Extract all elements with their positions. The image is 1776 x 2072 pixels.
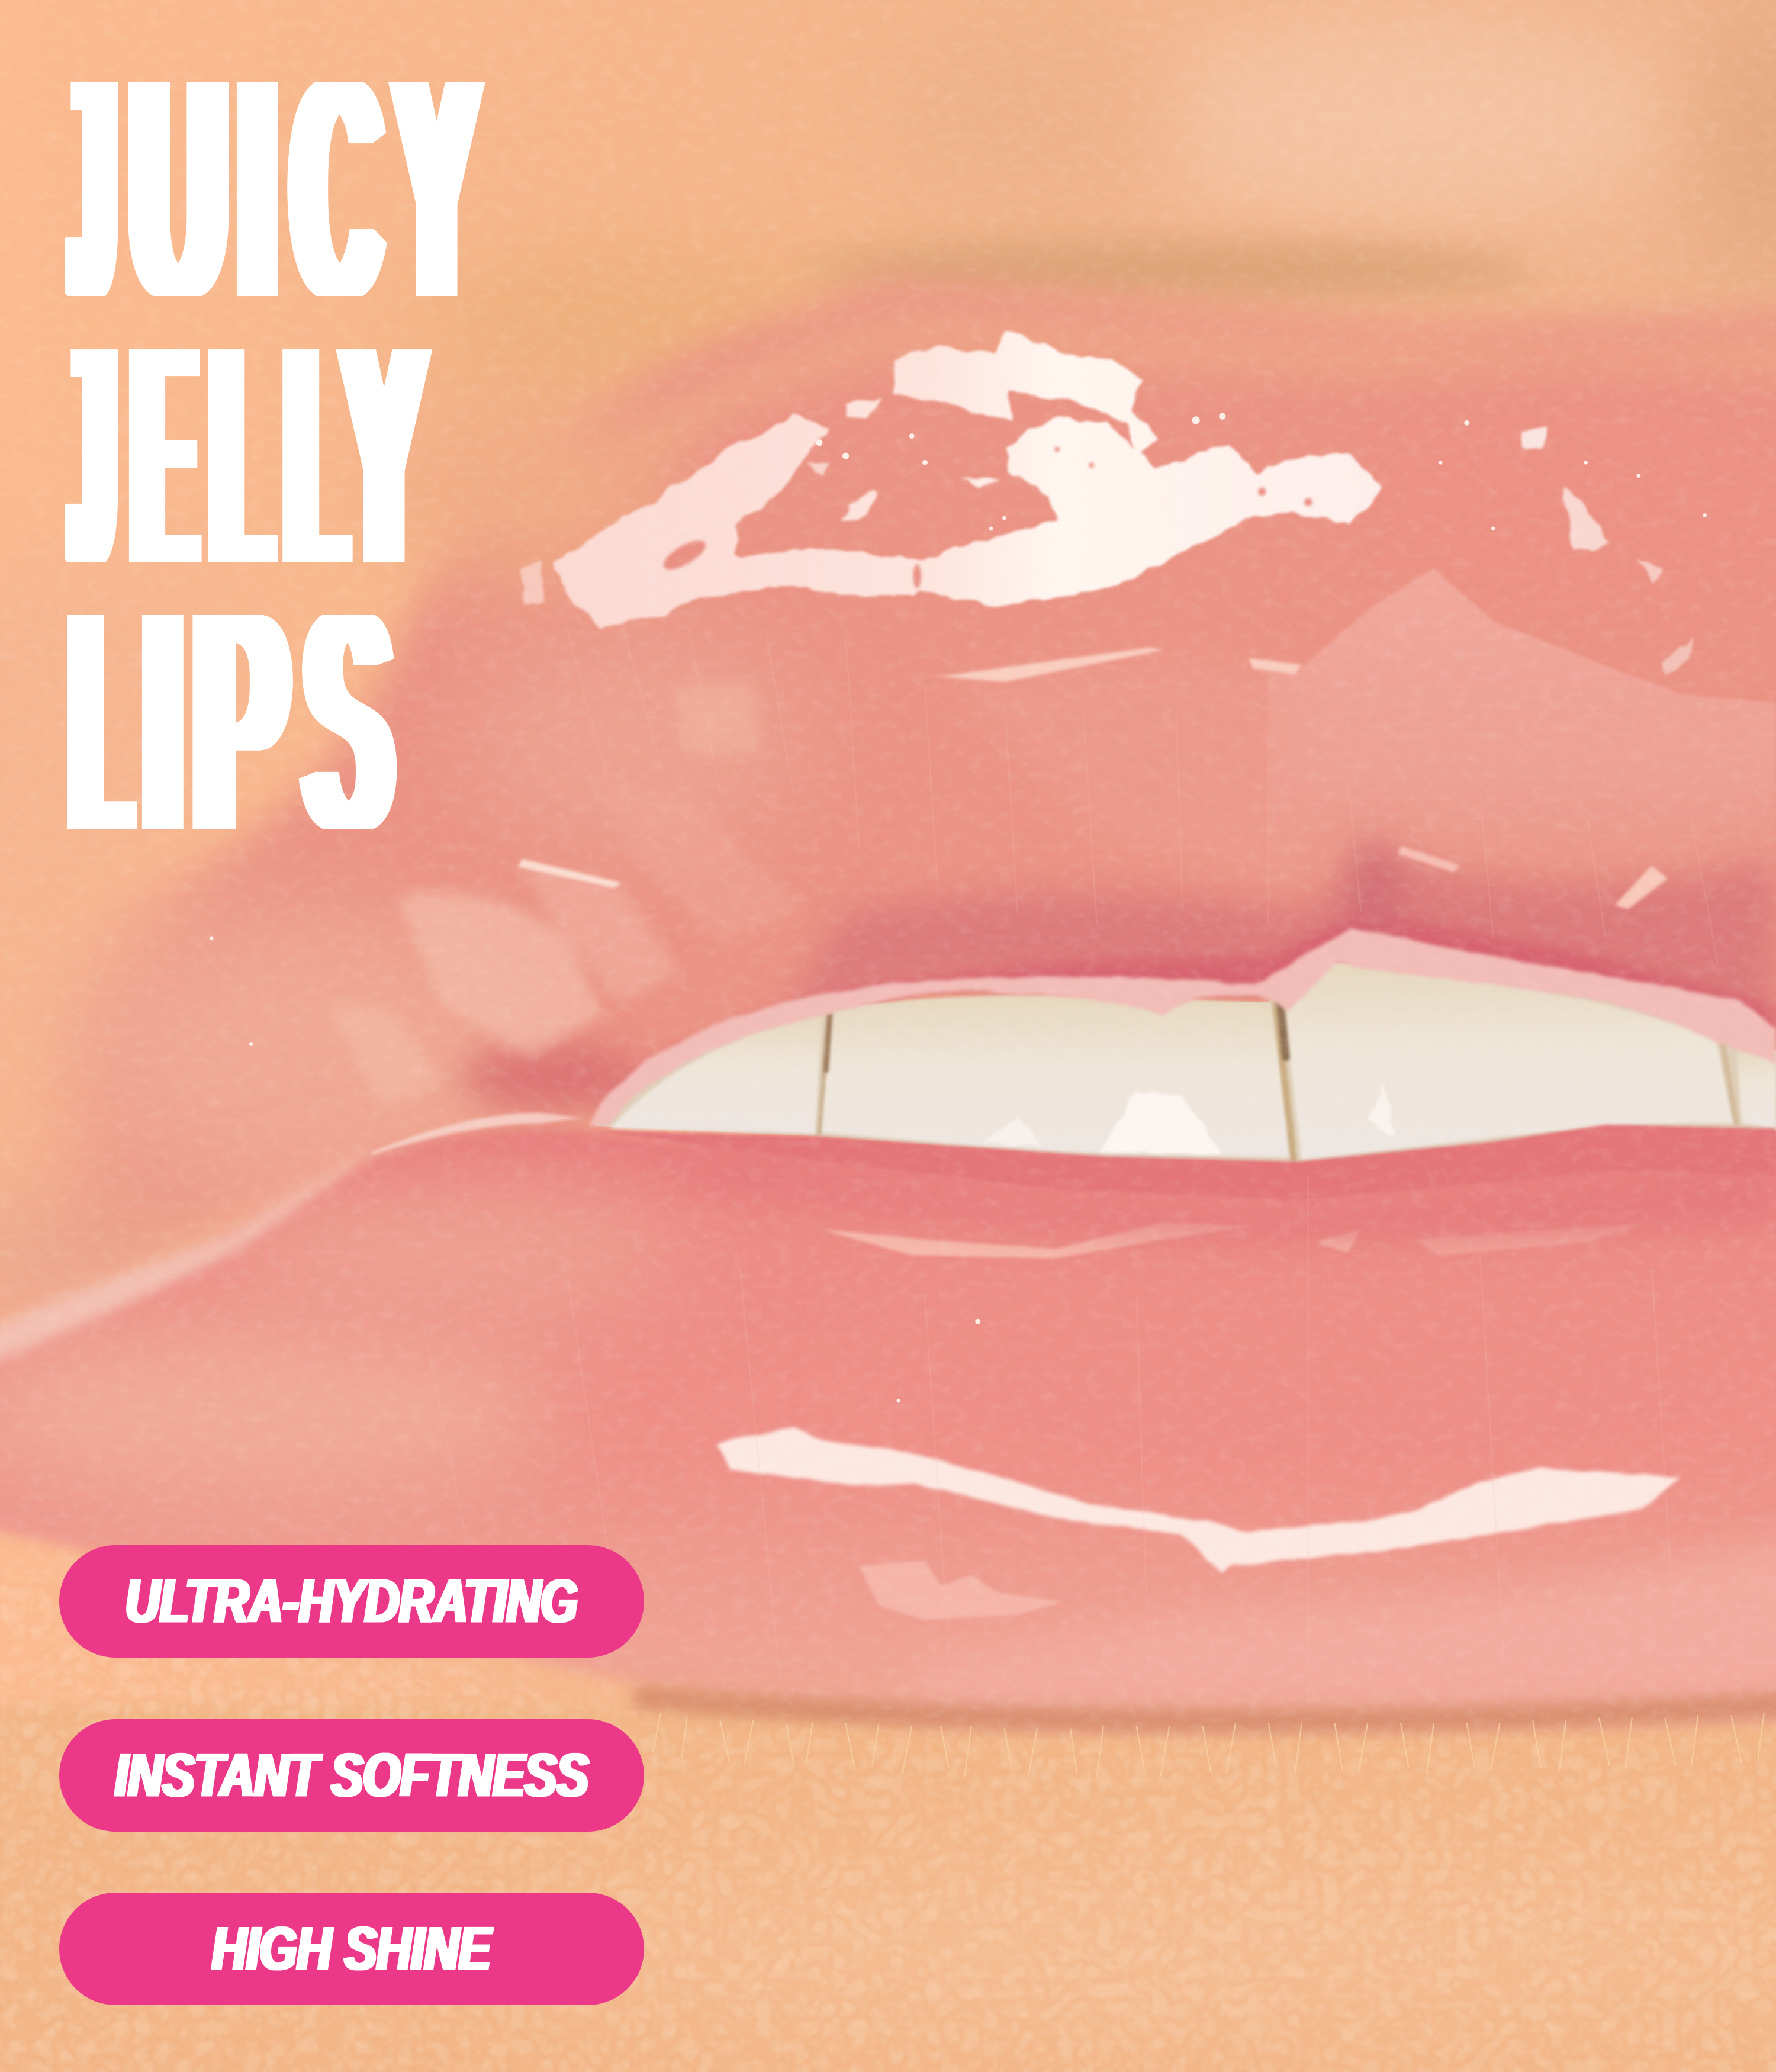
corner gloss line — [371, 1112, 581, 1155]
teeth — [594, 962, 1776, 1163]
upper lip — [0, 284, 1776, 1334]
dusky skin above corner fold — [0, 1202, 238, 1308]
lip vertical creases — [423, 621, 1718, 1704]
title: JUICY JELLY LIPS — [65, 78, 485, 833]
tooth 3 — [1285, 962, 1734, 1160]
left skin fade — [0, 555, 264, 1334]
gloss droplets — [210, 413, 1707, 1402]
left corner fold — [0, 1152, 371, 1369]
hairs along lower lip edge — [653, 1713, 1764, 1777]
shadow under lower lip — [634, 1697, 1776, 1721]
tooth 2 — [819, 995, 1291, 1157]
pill: high shine: HIGH SHINE — [212, 1915, 492, 1983]
tooth 4 — [1736, 1047, 1776, 1128]
holes in highlight — [659, 446, 1312, 588]
lower lip top edge — [594, 1125, 1776, 1200]
title line: JUICY — [65, 78, 485, 300]
lower lip sheen strokes — [819, 1222, 1652, 1620]
title line: JELLY — [36, 345, 533, 567]
tooth gaps — [819, 991, 1736, 1160]
pill: ultra-hydrating — [59, 1545, 644, 1658]
upper lip highlight — [522, 330, 1694, 674]
mouth interior — [594, 962, 1776, 1163]
reflection zone — [1269, 568, 1776, 912]
lower lip highlight — [716, 1427, 1681, 1572]
chin skin texture — [0, 1520, 1776, 2072]
top edge softening — [621, 307, 1776, 489]
pill: instant softness — [59, 1719, 644, 1832]
pill: high shine — [59, 1893, 644, 2005]
pill: ultra-hydrating: ULTRA-HYDRATING — [126, 1567, 578, 1636]
pale folds at lip corner — [326, 681, 806, 1108]
title line: LIPS — [36, 611, 533, 833]
tooth reflections — [984, 1083, 1395, 1155]
lower lip — [0, 1126, 1776, 1731]
deep shade above the mouth — [780, 859, 1776, 1031]
glossy lip rim — [588, 928, 1776, 1126]
pill: instant softness: INSTANT SOFTNESS — [115, 1741, 588, 1810]
tooth 1 — [610, 1015, 822, 1134]
